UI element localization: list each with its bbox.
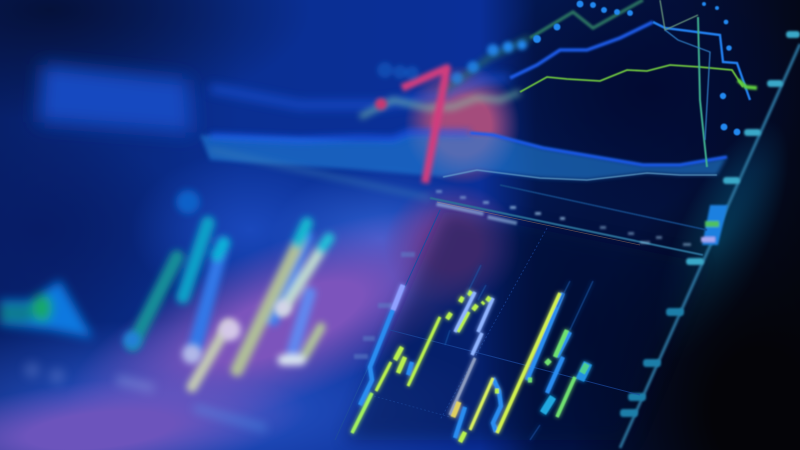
- time axis lines: [210, 150, 707, 255]
- blurred candle dots: [123, 190, 291, 364]
- line chart: blue line: [210, 22, 750, 105]
- y axis labels: [354, 252, 415, 359]
- green candles: [352, 291, 587, 442]
- blurred lower text row: [24, 362, 267, 431]
- candle wicks: [445, 265, 593, 440]
- blue candles: [360, 285, 588, 438]
- left y axis and grid: [335, 210, 640, 440]
- grey candle: [450, 358, 475, 415]
- right axis with ticks: [620, 31, 800, 448]
- time axis tick labels: [436, 190, 691, 246]
- yellow candle: [453, 402, 459, 417]
- line chart: pink line: [375, 68, 447, 183]
- thin vertical traces: [660, 0, 710, 167]
- blurred triangle chart left: [0, 280, 93, 338]
- line chart: dark green upper line: [440, 0, 643, 95]
- sharp candlestick chart: [352, 265, 593, 442]
- line chart: green line: [360, 65, 757, 117]
- blurred blue panel top left: [38, 64, 192, 133]
- dark chart panel lower right: [345, 210, 700, 440]
- blue band area chart: [200, 132, 727, 180]
- dot series: [377, 0, 740, 136]
- colored legend tags: [701, 205, 728, 245]
- blurred candlestick chart left: [133, 223, 329, 387]
- pale candles: [393, 285, 493, 355]
